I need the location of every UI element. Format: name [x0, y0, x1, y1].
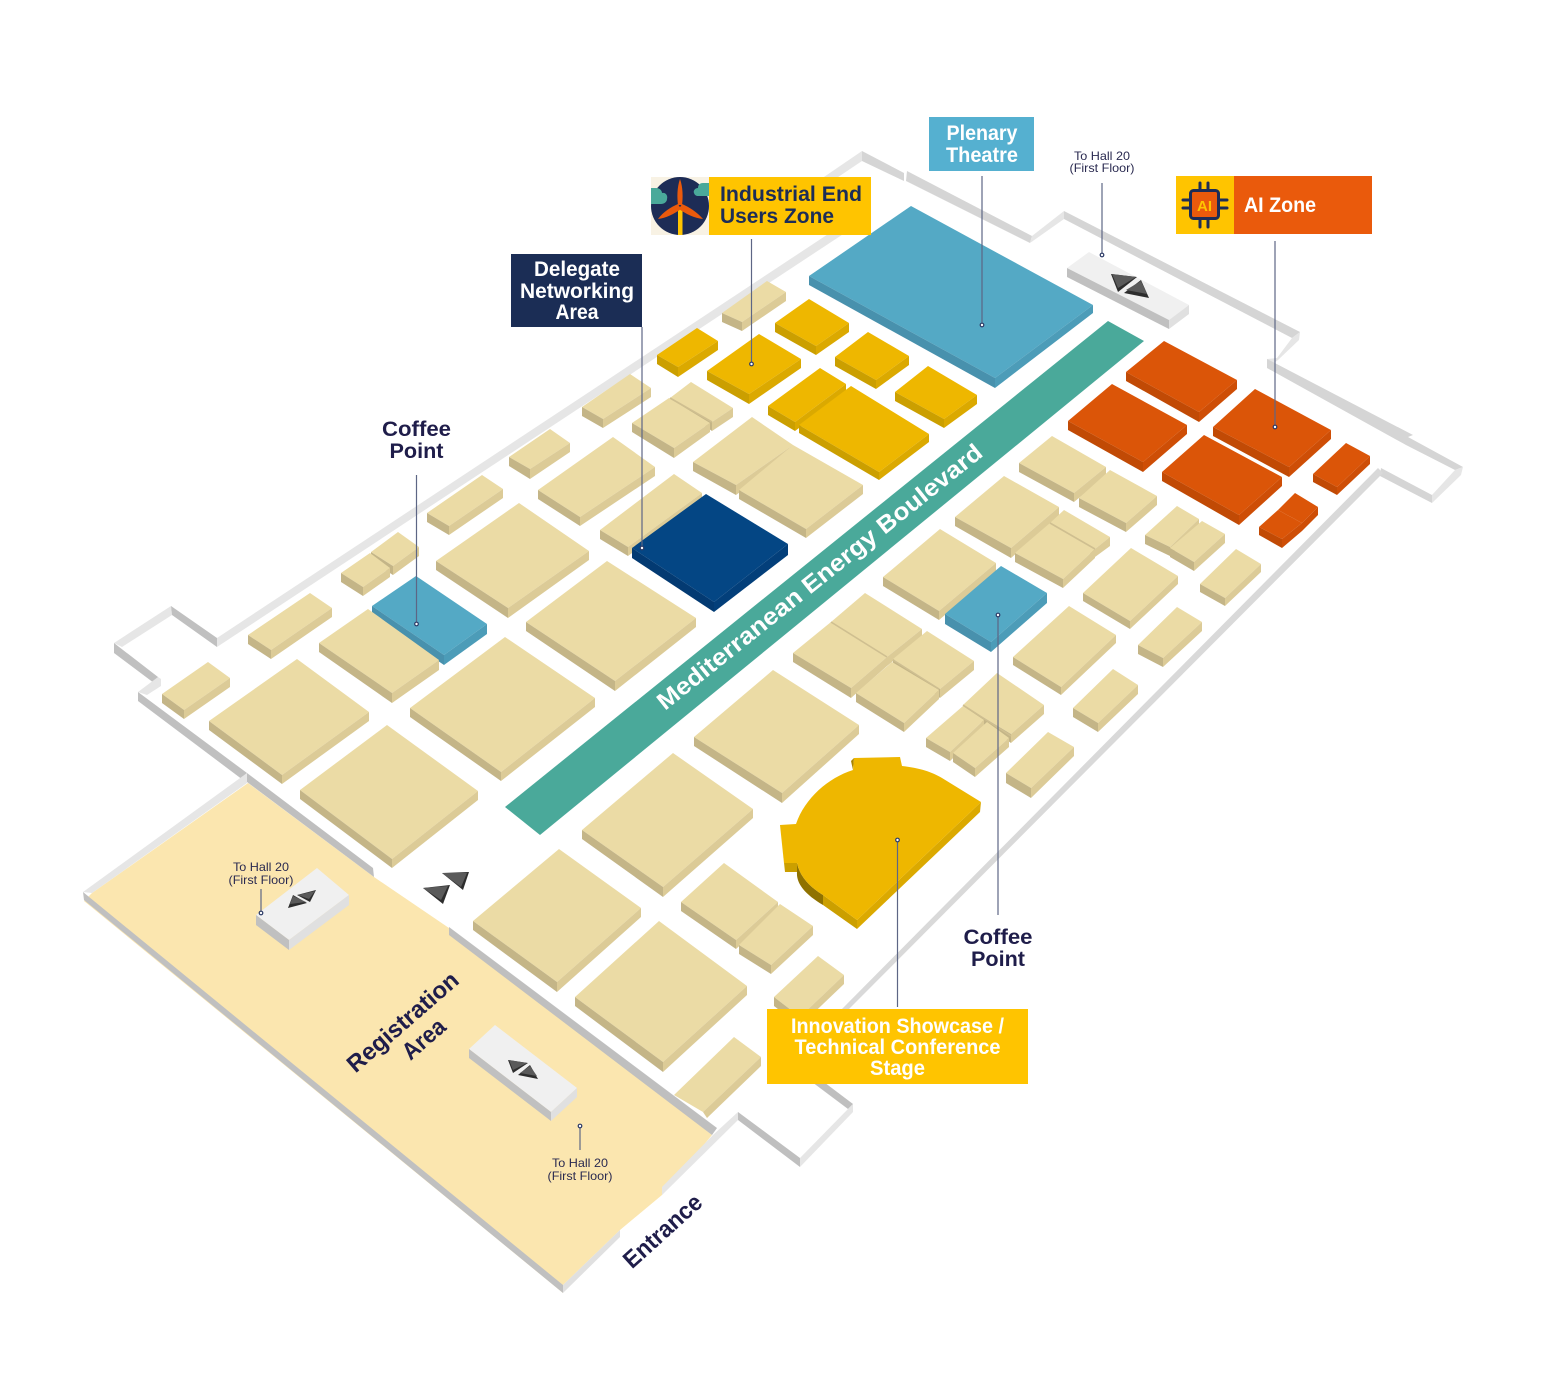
stand	[799, 386, 929, 480]
stand	[319, 609, 439, 703]
coffee point stand (left)	[372, 576, 487, 665]
label: industrial end users zone	[709, 177, 871, 235]
label: to hall 20, top right: (First Floor)	[1070, 161, 1134, 175]
label: coffee point right	[964, 926, 1032, 971]
label: industrial end users zone: Industrial End	[720, 183, 862, 206]
label: plenary theatre: Plenary	[946, 122, 1018, 145]
label: coffee point left: Coffee	[382, 418, 451, 441]
stand	[582, 374, 651, 428]
label: delegate networking area: Delegate	[534, 258, 620, 281]
stand	[582, 753, 753, 897]
leader line: innovation stage	[896, 838, 899, 1007]
stand	[1006, 732, 1074, 798]
industrial end users zone stands	[657, 299, 977, 480]
exhibition stands: upper left	[319, 281, 863, 703]
stand	[209, 659, 369, 784]
wall: registration left	[83, 773, 247, 893]
stand	[427, 475, 503, 535]
stand	[670, 382, 733, 431]
stand	[526, 561, 696, 691]
stand	[1079, 470, 1157, 532]
stand	[963, 673, 1044, 743]
stand	[1313, 443, 1370, 495]
label: innovation showcase: Innovation Showcase /	[791, 1015, 1004, 1038]
stairs block: bottom	[469, 1025, 577, 1121]
stand	[1162, 435, 1282, 525]
leader line: delegate networking	[640, 327, 644, 550]
label: plenary theatre: Theatre	[946, 144, 1018, 167]
leader line: coffee point left	[415, 475, 418, 626]
exhibition stands: left block	[162, 593, 595, 868]
stand	[768, 368, 846, 431]
stand	[793, 622, 887, 698]
leader line: plenary theatre	[980, 176, 984, 327]
label: innovation showcase: Technical Conference	[794, 1036, 1000, 1059]
stand	[1200, 549, 1261, 606]
icon: stairs arrows, bottom block	[508, 1060, 538, 1079]
stairs block: left	[256, 868, 349, 950]
stand	[248, 593, 332, 659]
stand	[473, 849, 641, 992]
stand	[1073, 669, 1138, 732]
AI zone stands	[1068, 341, 1370, 548]
icon: stairs arrows, main hall	[423, 872, 469, 904]
label: coffee point right: Coffee	[964, 926, 1032, 949]
stand	[1019, 436, 1106, 502]
stand	[657, 328, 718, 377]
label: to hall 20, bottom: To Hall 20	[552, 1156, 608, 1170]
stand	[835, 332, 909, 389]
stand	[509, 429, 570, 479]
label: to hall 20, left	[228, 860, 294, 887]
label: coffee point left	[382, 418, 451, 463]
icon: stairs arrows, top right block	[1111, 274, 1149, 298]
icon: AI chip	[1176, 176, 1234, 234]
entrance label: Entrance	[618, 1189, 708, 1274]
stand near entrance wall	[674, 1037, 761, 1118]
label: to hall 20, bottom: (First Floor)	[548, 1169, 612, 1183]
stand	[341, 553, 390, 596]
stand	[600, 474, 702, 556]
leader line: coffee point right	[996, 613, 1000, 915]
label: innovation showcase: Stage	[870, 1057, 925, 1080]
stand	[1213, 389, 1331, 477]
label: AI zone	[1234, 176, 1372, 234]
label: delegate networking area	[511, 254, 642, 327]
stand	[1259, 510, 1302, 548]
leader line: AI zone	[1273, 241, 1277, 429]
label: to hall 20, top right	[1070, 149, 1134, 175]
stand	[1015, 523, 1095, 588]
registration area label: Registration	[342, 967, 464, 1078]
plenary theatre block	[809, 206, 1093, 388]
stand	[1145, 506, 1199, 556]
stand	[1126, 341, 1237, 422]
icon: stairs arrows, left block	[288, 890, 316, 908]
label: AI zone: AI Zone	[1244, 194, 1316, 217]
boulevard name: Mediterranean Energy Boulevard	[652, 439, 988, 716]
label: coffee point right: Point	[971, 948, 1025, 971]
coffee point stand (right)	[945, 566, 1047, 652]
label: delegate networking area: Networking	[520, 280, 634, 303]
label: to hall 20, left: To Hall 20	[233, 860, 289, 874]
stand	[1083, 548, 1178, 629]
delegate networking stand	[632, 494, 788, 612]
registration area label: Area	[397, 1013, 452, 1066]
stairs block: top right	[1067, 252, 1189, 329]
stand	[953, 705, 1011, 777]
stand	[1068, 384, 1187, 472]
label: innovation showcase	[767, 1009, 1028, 1084]
icon: wind turbine	[651, 177, 709, 235]
leader line: stairs top right	[1100, 183, 1104, 257]
label: industrial end users zone: Users Zone	[720, 205, 834, 228]
stand	[774, 956, 844, 1026]
stand	[694, 670, 859, 803]
stand	[1050, 510, 1110, 557]
stand	[739, 445, 863, 538]
stand	[632, 398, 712, 458]
stand	[893, 631, 974, 698]
exhibition stands: right block	[473, 436, 1261, 1072]
label: plenary theatre	[929, 117, 1034, 171]
stand	[1170, 521, 1225, 571]
stand	[1138, 607, 1202, 667]
stand	[831, 593, 922, 666]
stand	[681, 863, 778, 949]
stand	[926, 706, 984, 761]
stand	[410, 637, 595, 781]
stand	[739, 904, 813, 974]
stand	[883, 529, 996, 620]
stand	[300, 725, 478, 868]
stand	[775, 299, 849, 355]
leader line: industrial end users	[750, 239, 753, 366]
outer walls of the main hall	[114, 151, 1463, 1167]
stand	[856, 660, 939, 732]
stand	[693, 417, 793, 495]
label: coffee point left: Point	[390, 440, 444, 463]
stand	[1013, 606, 1116, 695]
leader line: stairs bottom	[578, 1124, 582, 1150]
stand	[895, 366, 977, 428]
stand	[538, 437, 655, 526]
label: to hall 20, left: (First Floor)	[228, 873, 294, 887]
stand	[371, 532, 419, 575]
stand	[722, 281, 786, 331]
innovation showcase stage	[780, 757, 981, 929]
stand	[955, 476, 1059, 558]
label: to hall 20, bottom	[548, 1156, 612, 1183]
stand	[707, 334, 801, 404]
boulevard	[505, 321, 1144, 835]
stand	[1278, 493, 1318, 531]
stand	[436, 503, 589, 618]
label: to hall 20, top right: To Hall 20	[1074, 149, 1130, 163]
walls of registration area	[83, 773, 738, 1293]
label: delegate networking area: Area	[556, 301, 599, 324]
registration area floor	[83, 773, 712, 1293]
leader line: stairs left	[259, 889, 263, 915]
icon: AI chip: AI	[1197, 198, 1212, 215]
stand	[575, 921, 747, 1072]
stand	[162, 662, 230, 719]
